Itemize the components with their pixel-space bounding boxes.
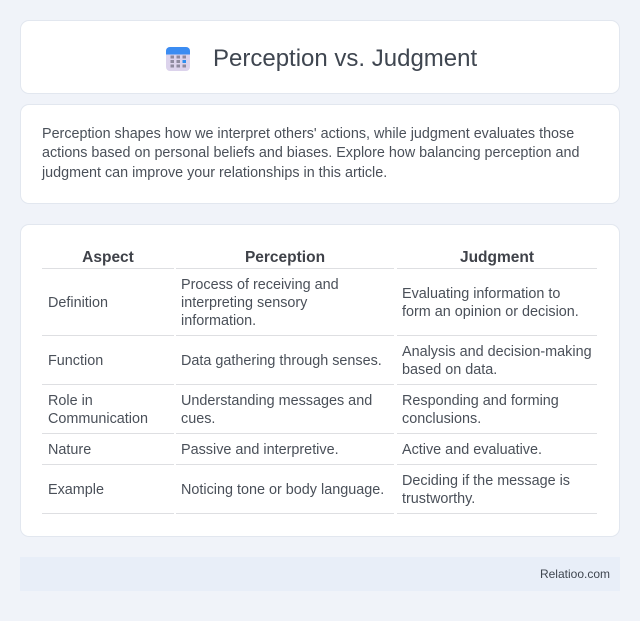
row: nature: Nature bbox=[48, 442, 91, 458]
row: definition: Process of receiving and bbox=[181, 277, 339, 293]
text block: introduction bbox=[42, 126, 579, 181]
table header bbox=[42, 249, 597, 269]
row: role in communication: Role in bbox=[48, 393, 93, 409]
row: role in communication: cues. bbox=[181, 411, 215, 427]
row: function: Data gathering through senses. bbox=[181, 353, 382, 369]
panel: comparison table bbox=[20, 224, 620, 537]
footer text: Relatioo.com bbox=[540, 567, 610, 581]
row: example: Noticing tone or body language. bbox=[181, 482, 384, 498]
row: definition bbox=[42, 277, 597, 336]
row: role in communication bbox=[42, 393, 597, 434]
icon: calendar bbox=[166, 47, 190, 71]
row: definition: information. bbox=[181, 313, 256, 329]
title: Perception vs. Judgment bbox=[213, 45, 477, 72]
row: nature: Passive and interpretive. bbox=[181, 442, 339, 458]
table header: Aspect bbox=[82, 249, 134, 266]
row: example bbox=[42, 473, 597, 514]
row: role in communication: conclusions. bbox=[402, 411, 481, 427]
row: definition: form an opinion or decision. bbox=[402, 304, 579, 320]
row: example: trustworthy. bbox=[402, 491, 475, 507]
row: role in communication: Communication bbox=[48, 411, 148, 427]
row: function: Function bbox=[48, 353, 103, 369]
text block: introduction: judgment can improve your relationships in this article. bbox=[42, 165, 387, 181]
row: example: Deciding if the message is bbox=[402, 473, 570, 489]
text block: introduction: Perception shapes how we interpret others' actions, while judgment evaluates those bbox=[42, 126, 574, 142]
row: function: based on data. bbox=[402, 362, 497, 378]
text block: introduction: actions based on personal beliefs and biases. Explore how balancing perception and bbox=[42, 145, 579, 161]
row: example: Example bbox=[48, 482, 104, 498]
row: definition: Evaluating information to bbox=[402, 286, 560, 302]
row: role in communication: Understanding messages and bbox=[181, 393, 372, 409]
row: function bbox=[42, 344, 597, 385]
panel: introduction bbox=[20, 104, 620, 204]
row: definition: Definition bbox=[48, 295, 108, 311]
row: nature bbox=[42, 442, 597, 465]
panel: header bbox=[20, 20, 620, 94]
table header: Judgment bbox=[460, 249, 534, 266]
row: definition: interpreting sensory bbox=[181, 295, 307, 311]
row: role in communication: Responding and forming bbox=[402, 393, 559, 409]
table header: Perception bbox=[245, 249, 325, 266]
footer bar bbox=[20, 557, 620, 591]
row: function: Analysis and decision-making bbox=[402, 344, 592, 360]
row: nature: Active and evaluative. bbox=[402, 442, 542, 458]
